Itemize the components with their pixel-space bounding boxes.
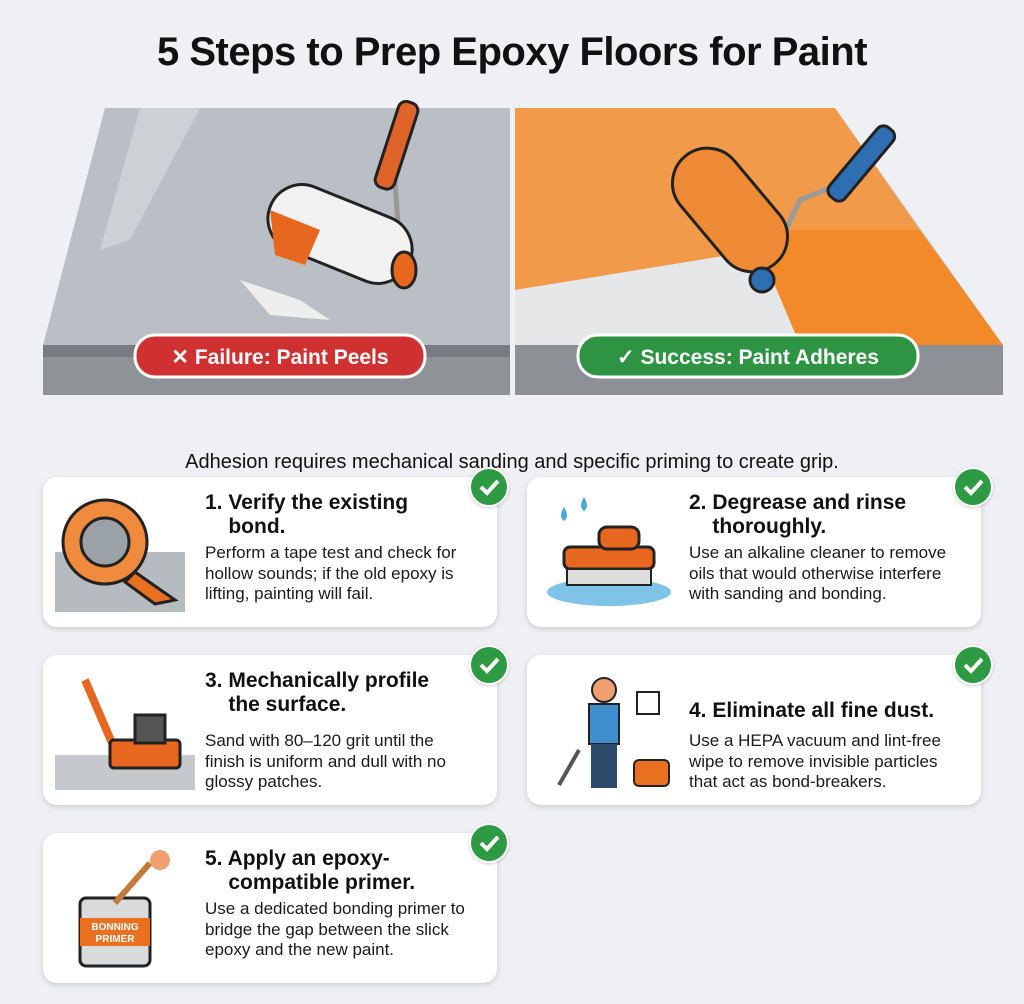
- panel: step 3: [43, 655, 497, 805]
- heading: compatible primer.: [228, 871, 415, 894]
- heading: [205, 847, 415, 894]
- icon: check: [469, 645, 509, 685]
- body text: Use an alkaline cleaner to remove oils that would otherwise interfere with sanding and bonding.: [689, 543, 946, 603]
- icon: roller success: [658, 123, 898, 292]
- heading: the surface.: [228, 693, 346, 716]
- icon: brush: [547, 497, 671, 606]
- heading: 5. Apply an epoxy-: [205, 847, 390, 870]
- heading: 3. Mechanically profile: [205, 669, 429, 692]
- body text: Sand with 80–120 grit until the finish is uniform and dull with no glossy patches.: [205, 731, 446, 791]
- icon: check: [953, 645, 993, 685]
- title: 5 Steps to Prep Epoxy Floors for Paint: [157, 30, 867, 74]
- panel: failure: [43, 99, 510, 395]
- heading: bond.: [228, 515, 285, 538]
- badge: failure: ✕ Failure: Paint Peels: [171, 346, 389, 369]
- icon: tape: [55, 498, 185, 612]
- icon: primer can: [78, 850, 170, 968]
- body text: Use a dedicated bonding primer to bridge the gap between the slick epoxy and the new paint.: [205, 899, 465, 959]
- heading: 1. Verify the existing: [205, 491, 408, 514]
- panel: step 5: [43, 833, 497, 983]
- icon: sander: [55, 678, 195, 790]
- heading: [205, 669, 429, 716]
- heading: thoroughly.: [712, 515, 826, 538]
- heading: [205, 491, 408, 538]
- panel: step 2: [527, 477, 981, 627]
- icon: person vacuuming: [557, 677, 670, 788]
- badge: success: [578, 335, 918, 377]
- hero comparison illustration: [43, 100, 1003, 395]
- icon: check: [469, 467, 509, 507]
- badge: failure: [135, 335, 425, 377]
- panel: step 1: [43, 477, 497, 627]
- panel: success: [515, 108, 1003, 395]
- heading: [689, 491, 906, 538]
- icon: check: [953, 467, 993, 507]
- icon: primer can: PRIMER: [96, 934, 135, 945]
- body text: Perform a tape test and check for hollow sounds; if the old epoxy is lifting, painting will fail.: [205, 543, 456, 603]
- panel: step 4: [527, 655, 981, 805]
- badge: success: ✓ Success: Paint Adheres: [617, 346, 879, 369]
- icon: check: [469, 823, 509, 863]
- body text: Use a HEPA vacuum and lint-free wipe to remove invisible particles that act as bond-breakers.: [689, 731, 941, 791]
- heading: 4. Eliminate all fine dust.: [689, 699, 934, 722]
- heading: 2. Degrease and rinse: [689, 491, 906, 514]
- subtitle: Adhesion requires mechanical sanding and specific priming to create grip.: [185, 451, 839, 473]
- icon: roller failing: [240, 99, 422, 320]
- icon: primer can: BONNING: [91, 922, 139, 933]
